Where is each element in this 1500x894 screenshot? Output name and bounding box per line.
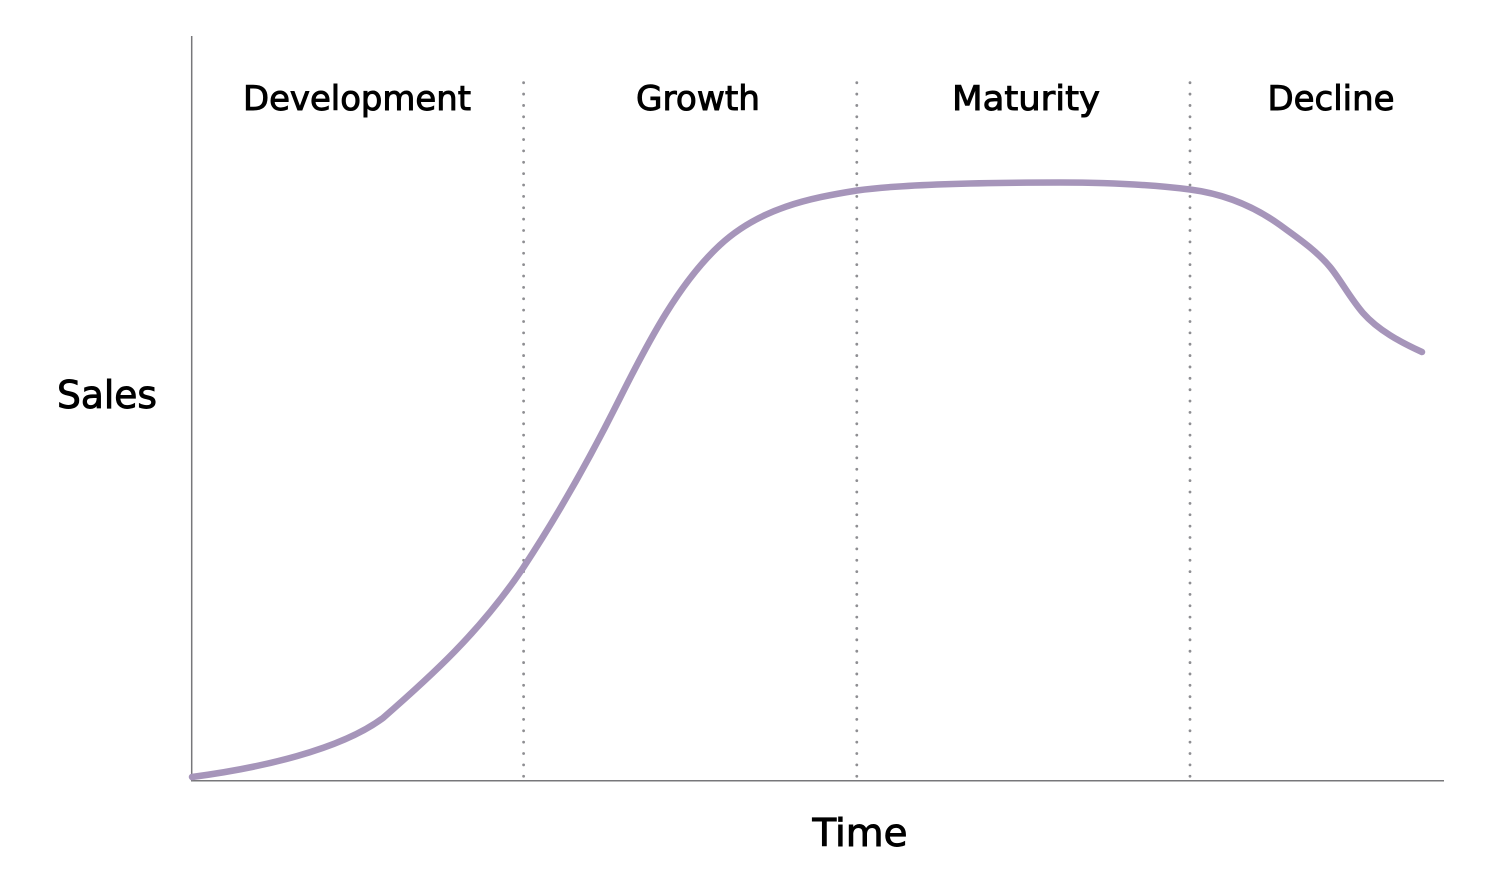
label: Growth: Growth [636, 79, 760, 119]
y axis title: Sales: Sales [57, 373, 157, 417]
label: Maturity: Maturity [952, 79, 1100, 119]
divider: development to growth [522, 83, 525, 778]
divider: growth to maturity [855, 83, 858, 778]
sales curve [192, 182, 1422, 777]
x axis title: Time: Time [811, 811, 908, 855]
label: Development: Development [243, 79, 471, 119]
y axis [191, 36, 193, 781]
divider: maturity to decline [1189, 83, 1191, 778]
x axis [191, 780, 1444, 782]
label: Decline: Decline [1268, 79, 1394, 119]
